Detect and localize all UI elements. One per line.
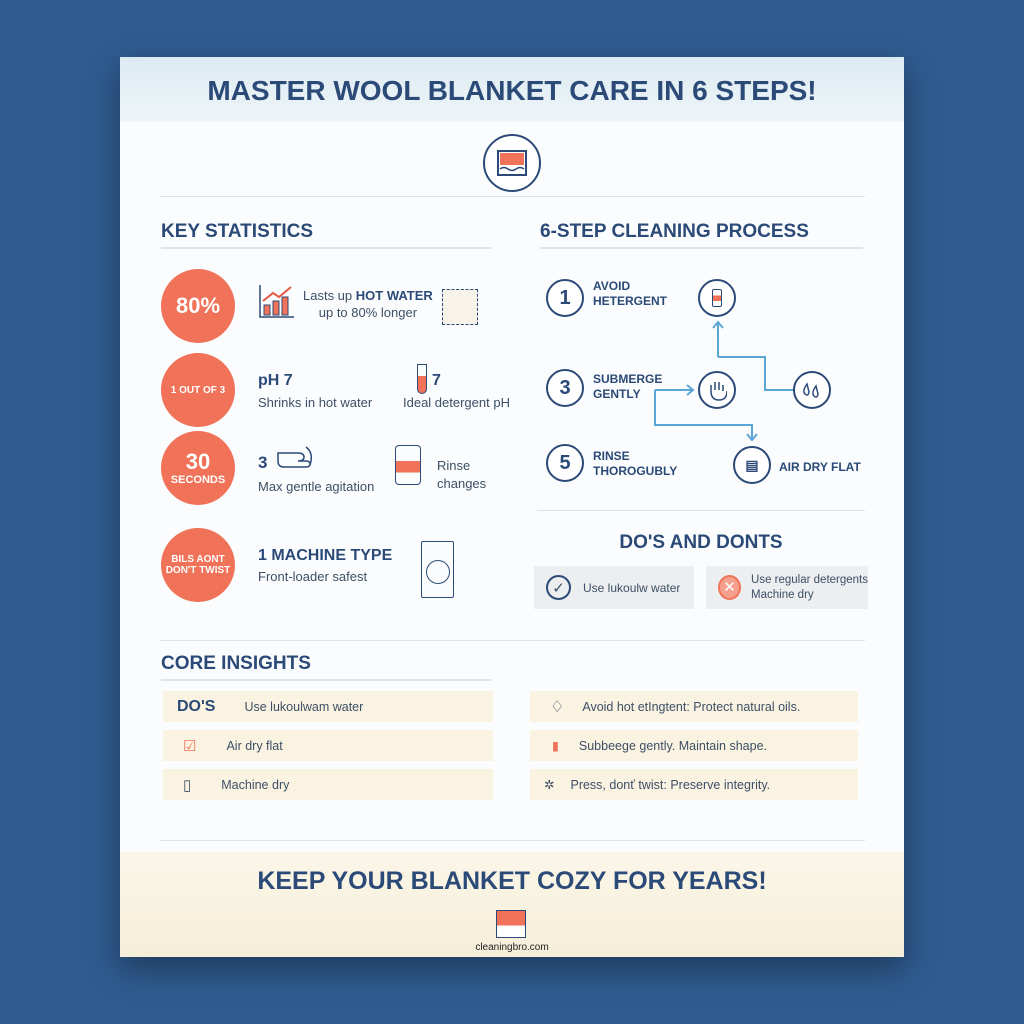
process flow: 3	[559, 376, 571, 398]
stats: Ideal detergent pH	[403, 395, 510, 410]
process flow: SUBMERGE	[593, 372, 662, 386]
stats: 1 MACHINE TYPE	[258, 547, 392, 564]
insights right: Avoid hot etIngtent: Protect natural oils.	[582, 700, 800, 714]
title band	[120, 57, 904, 122]
stats: 3	[258, 453, 267, 472]
stat 80%: 80%	[176, 293, 220, 318]
dont box: Machine dry	[751, 588, 814, 600]
stats	[161, 269, 510, 602]
process flow: 1	[559, 286, 571, 308]
process flow: GENTLY	[593, 387, 641, 401]
insights right: ✲	[544, 778, 554, 792]
insights left: Air dry flat	[226, 738, 283, 752]
heading: dos and donts: DO'S AND DONTS	[619, 532, 783, 553]
insights right: Press, donť twist: Preserve integrity.	[570, 778, 770, 792]
process flow: RINSE	[593, 449, 630, 463]
process flow: 5	[559, 452, 571, 474]
stat 1 out of 3	[161, 353, 235, 427]
process flow: HETERGENT	[593, 294, 667, 308]
insights right: ▮	[552, 739, 559, 753]
process flow: ▤	[745, 456, 759, 472]
footer band	[120, 852, 904, 957]
insights right: ♢	[550, 698, 564, 716]
do box	[534, 566, 694, 609]
insights left: DO'S	[177, 698, 215, 714]
process flow: AIR DRY FLAT	[779, 460, 861, 474]
card	[120, 57, 904, 957]
dont box: Use regular detergents	[751, 574, 868, 586]
stat twist	[161, 528, 235, 602]
do box: Use lukoulw water	[583, 580, 680, 594]
icon: blanket	[483, 134, 541, 192]
heading: core insights: CORE INSIGHTS	[161, 653, 311, 674]
insights right	[530, 691, 858, 800]
stats: Max gentle agitation	[258, 479, 374, 494]
heading: process: 6-STEP CLEANING PROCESS	[540, 221, 809, 242]
footer band: cleaningbro.com	[475, 942, 549, 953]
stat 30 seconds	[161, 431, 235, 505]
dont box	[706, 566, 868, 609]
do box: ✓	[552, 580, 565, 596]
stat 80%	[161, 269, 235, 343]
insights right: Subbeege gently. Maintain shape.	[579, 738, 767, 752]
stat 30 seconds: 30	[186, 449, 210, 474]
stats: up to 80% longer	[319, 305, 417, 320]
dont box: ✕	[723, 579, 736, 596]
stats: Lasts up HOT WATER	[303, 288, 433, 303]
stats: 7	[432, 372, 441, 389]
stat twist: BILS AONT	[171, 554, 225, 565]
stats: Rinse	[437, 458, 470, 473]
stat 30 seconds: SECONDS	[171, 474, 225, 486]
process flow	[546, 279, 861, 484]
insights left	[163, 691, 493, 800]
process flow: AVOID	[593, 279, 630, 293]
icon: footer blanket	[496, 910, 526, 938]
stat twist: DON'T TWIST	[166, 565, 230, 576]
insights left: ▯	[183, 776, 191, 794]
footer band: KEEP YOUR BLANKET COZY FOR YEARS!	[257, 867, 767, 895]
stats: changes	[437, 476, 486, 491]
title band: MASTER WOOL BLANKET CARE IN 6 STEPS!	[207, 75, 817, 106]
stats: Front-loader safest	[258, 569, 367, 584]
heading: key statistics: KEY STATISTICS	[161, 221, 313, 242]
process flow: THOROGUBLY	[593, 464, 677, 478]
insights left: ☑	[183, 738, 196, 754]
stats: Shrinks in hot water	[258, 395, 372, 410]
stat 1 out of 3: 1 OUT OF 3	[171, 384, 225, 396]
stats: pH 7	[258, 372, 293, 389]
insights left: Machine dry	[221, 778, 289, 792]
insights left: Use lukoulwam water	[244, 700, 363, 714]
